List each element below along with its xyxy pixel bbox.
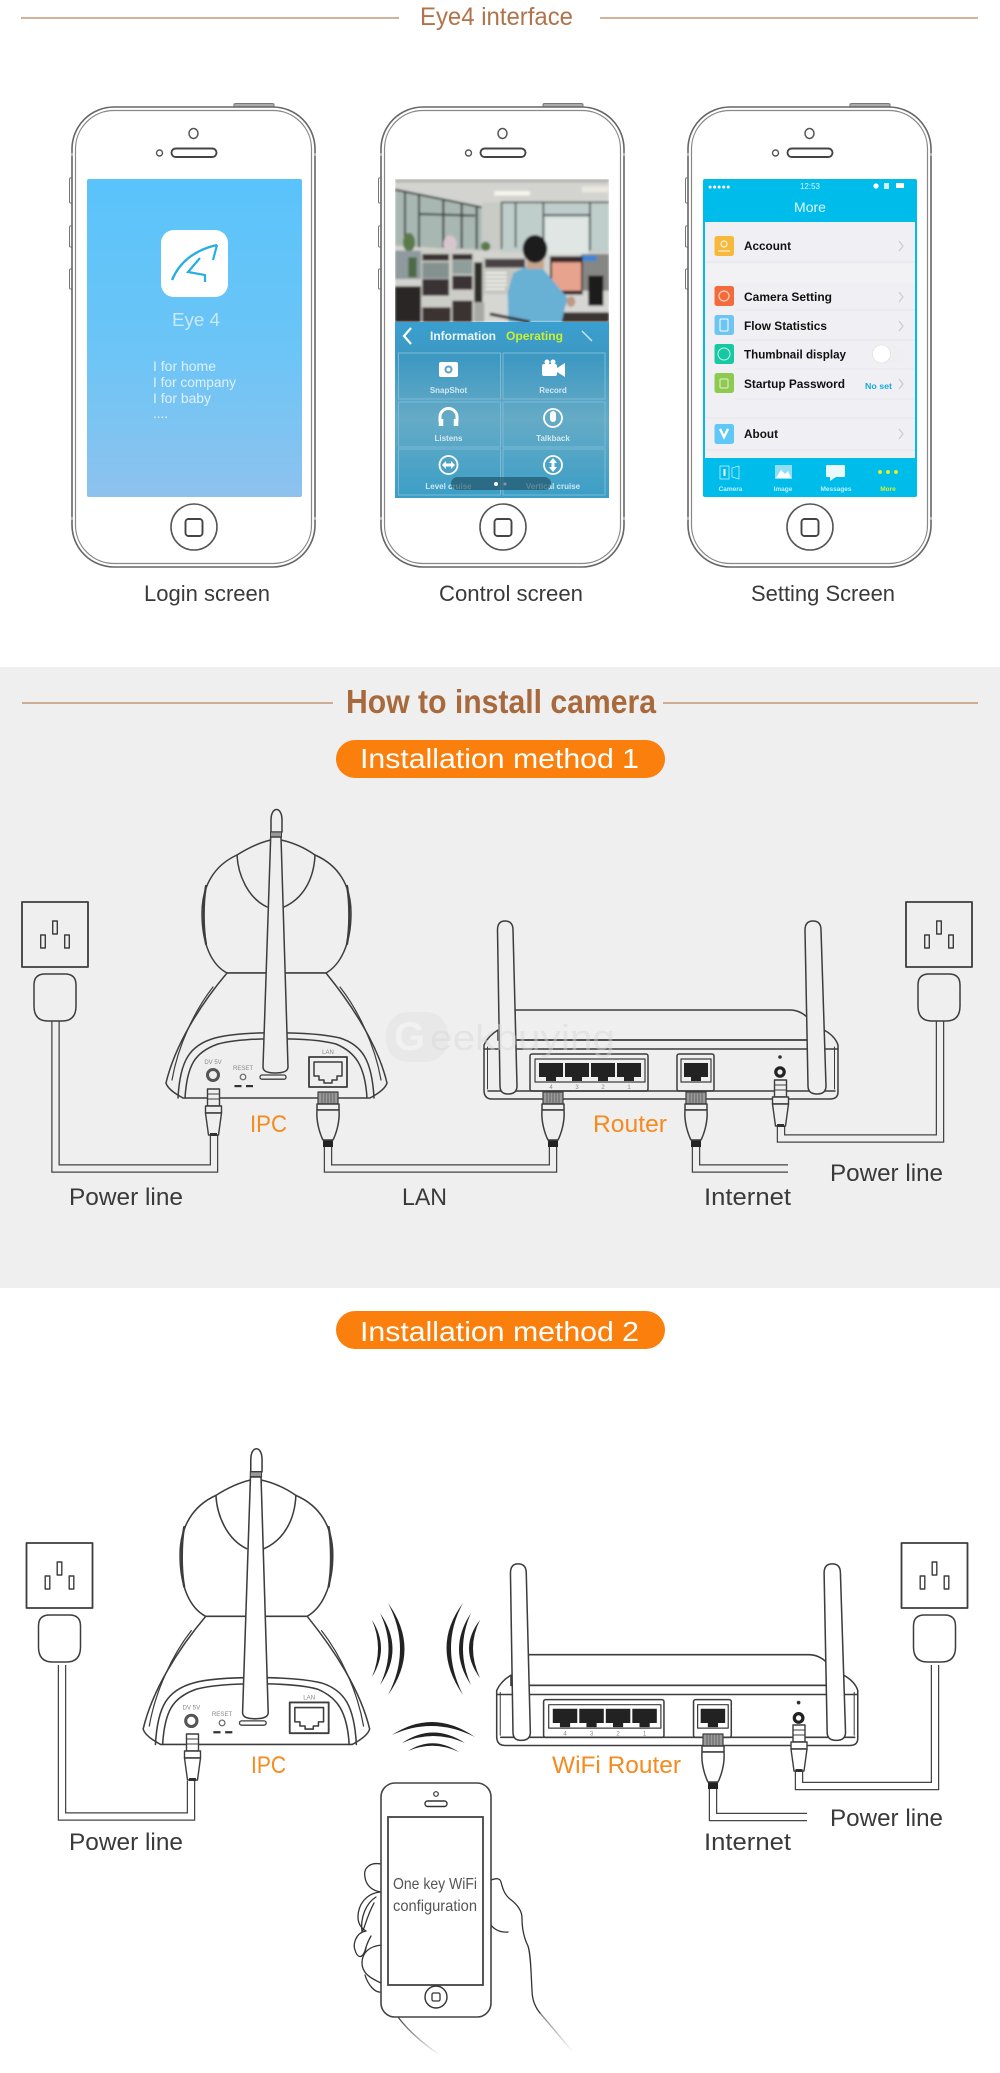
control panel: Talkback xyxy=(536,434,570,443)
badge: Installation method 1 xyxy=(336,740,665,778)
cables xyxy=(62,1665,935,1817)
labels: method 2: Power line xyxy=(830,1805,943,1832)
text: I for list: I for home xyxy=(153,358,216,374)
tab bar: Image xyxy=(774,486,793,493)
panel: login screen phone xyxy=(70,104,315,606)
control panel xyxy=(395,322,609,498)
control panel: Record xyxy=(539,386,567,395)
icon: router: 4 xyxy=(549,1085,553,1091)
icon: router: 1 xyxy=(627,1085,631,1091)
labels: method 2: WiFi Router xyxy=(552,1752,681,1779)
settings display: More xyxy=(794,199,826,215)
panel: control screen phone xyxy=(378,104,624,606)
watermark xyxy=(386,1012,615,1062)
icon: wifi waves to camera xyxy=(372,1603,404,1695)
labels: method 2: Power line xyxy=(69,1829,183,1856)
row: Thumbnail display: Thumbnail display xyxy=(744,348,846,362)
icon: IP camera xyxy=(166,810,387,1098)
row: Thumbnail display xyxy=(714,344,905,364)
phone: configuration xyxy=(393,1898,477,1915)
camera photo of office xyxy=(395,179,609,322)
icon: vertical cruise xyxy=(544,456,562,474)
labels: method 1: Internet xyxy=(704,1184,791,1211)
settings display xyxy=(703,179,917,497)
panel: method 1 grey band xyxy=(0,667,1000,1288)
plugs xyxy=(184,1725,807,1789)
icon: WiFi router xyxy=(497,1564,858,1745)
row: Startup Password: No set xyxy=(865,381,892,391)
plugs xyxy=(206,1080,788,1147)
labels: method 1: Power line xyxy=(69,1184,183,1211)
icon: hand holding phone xyxy=(354,1783,573,2055)
control panel: Listens xyxy=(434,434,463,443)
heading: Eye4 interface: Eye4 interface xyxy=(420,3,573,31)
login screen display: Eye 4 xyxy=(172,310,220,330)
icon: level cruise xyxy=(440,456,458,474)
icon: router: 2 xyxy=(601,1085,605,1091)
icon: IP camera: RESET xyxy=(233,1066,253,1072)
icon: WiFi router: 3 xyxy=(590,1730,594,1737)
control panel: SnapShot xyxy=(430,386,467,395)
icon: router xyxy=(484,921,838,1099)
badge: Installation method 2 xyxy=(336,1311,665,1349)
icon: IP camera: RESET xyxy=(212,1711,233,1718)
icon: WiFi router: 2 xyxy=(616,1730,620,1737)
icon: WiFi router: 1 xyxy=(643,1730,647,1737)
cables xyxy=(56,1021,940,1168)
icon: record xyxy=(542,360,565,377)
tab bar xyxy=(719,465,898,493)
heading: How to install camera: How to install camera xyxy=(346,683,657,720)
text: I for list: .... xyxy=(153,405,168,421)
panel: login screen phone: Login screen xyxy=(144,581,270,606)
tab bar: Messages xyxy=(820,486,852,493)
badge: Installation method 1: Installation method 1 xyxy=(360,743,639,774)
control panel: Level cruise xyxy=(425,482,472,491)
tab bar: Camera xyxy=(719,486,743,493)
labels: method 2: IPC xyxy=(251,1752,286,1779)
watermark: eekbuying xyxy=(430,1017,615,1058)
text: I for list: I for company xyxy=(153,374,236,390)
settings display: ●●●●● xyxy=(708,184,731,191)
badge: Installation method 2: Installation method 2 xyxy=(360,1316,639,1347)
power socket right xyxy=(906,902,972,1021)
row: Flow Statistics xyxy=(714,315,903,335)
icon: wifi waves to phone xyxy=(392,1722,475,1752)
icon: listens xyxy=(440,408,457,426)
panel: control screen phone: Control screen xyxy=(439,581,583,606)
labels: method 2 xyxy=(69,1752,943,1856)
diagram: method 1 wiring xyxy=(22,810,972,1168)
labels: method 1: Power line xyxy=(830,1160,943,1187)
row: Startup Password: Startup Password xyxy=(744,377,845,391)
row: Camera Setting: Camera Setting xyxy=(744,290,832,304)
icon: IP camera: DV 5V xyxy=(204,1060,222,1066)
icon: IP camera xyxy=(143,1449,370,1744)
row: Account xyxy=(714,236,903,256)
tab bar: More xyxy=(880,486,896,493)
watermark: G xyxy=(394,1015,425,1059)
icon: IP camera: LAN xyxy=(322,1050,334,1056)
control panel: Information xyxy=(430,329,496,343)
row: Startup Password xyxy=(714,373,903,393)
icon: talkback xyxy=(544,409,562,427)
phone: One key WiFi xyxy=(393,1876,477,1893)
settings display: 12:53 xyxy=(800,182,821,191)
icon: snapshot xyxy=(439,362,458,377)
control panel: Vertical cruise xyxy=(526,482,581,491)
labels: method 1: LAN xyxy=(402,1184,447,1211)
row: About xyxy=(714,424,903,444)
labels: method 1 xyxy=(69,1111,943,1211)
labels: method 2: Internet xyxy=(704,1829,791,1856)
power socket left xyxy=(22,902,88,1021)
icon: router: 3 xyxy=(575,1085,579,1091)
row: Flow Statistics: Flow Statistics xyxy=(744,319,827,333)
icon: wifi waves to router xyxy=(446,1603,480,1695)
icon: Eye4 app logo xyxy=(161,230,228,297)
row: Camera Setting xyxy=(714,286,903,306)
diagram: method 2 wiring xyxy=(26,1449,968,1817)
panel: setting screen phone: Setting Screen xyxy=(751,581,895,606)
panel: setting screen phone xyxy=(686,104,931,606)
row: Account: Account xyxy=(744,239,791,253)
hand xyxy=(354,1864,573,2055)
icon: IP camera: DV 5V xyxy=(182,1705,201,1712)
labels: method 1: IPC xyxy=(250,1111,287,1138)
icon: IP camera: LAN xyxy=(303,1694,315,1701)
login screen display xyxy=(87,179,302,497)
text: I for list xyxy=(153,358,236,421)
labels: method 1: Router xyxy=(593,1111,667,1138)
row: About: About xyxy=(744,427,778,441)
text: I for list: I for baby xyxy=(153,390,211,406)
power socket right xyxy=(902,1543,968,1662)
power socket left xyxy=(26,1543,92,1662)
control panel: Operating xyxy=(506,329,563,343)
phone xyxy=(381,1783,491,2017)
icon: WiFi router: 4 xyxy=(563,1730,567,1737)
